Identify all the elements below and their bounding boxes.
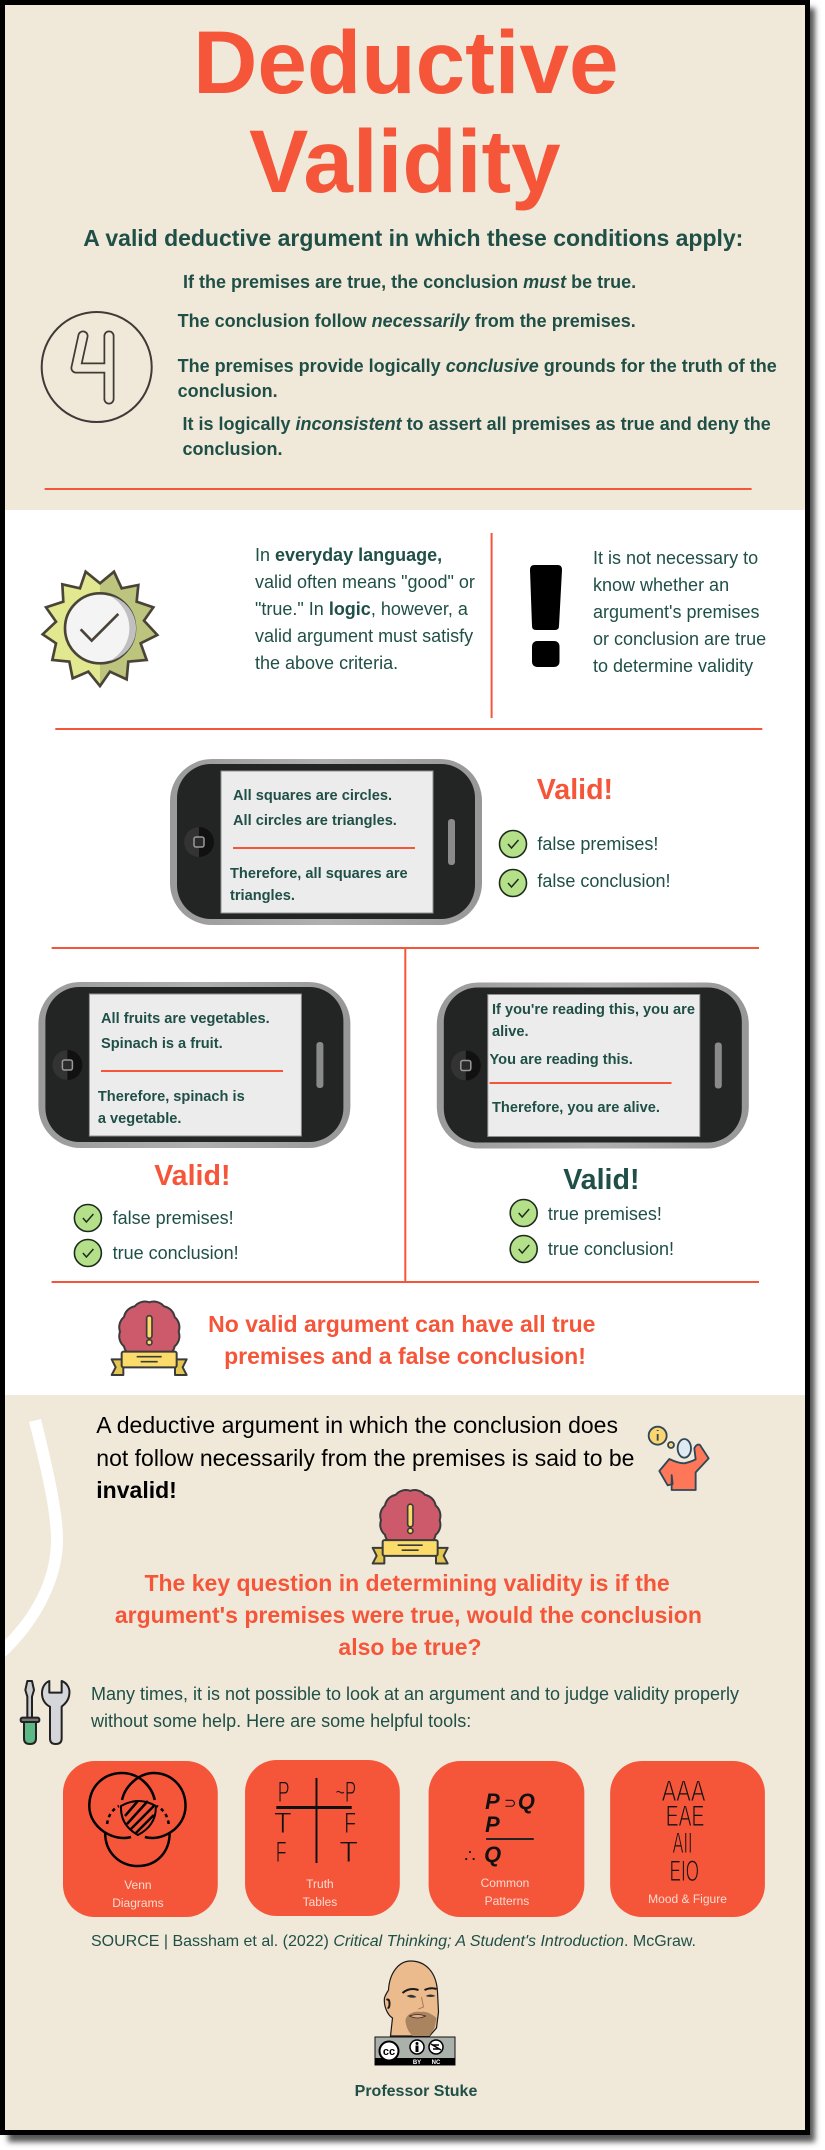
text: validity note: argument's premises [593, 602, 760, 622]
text: validity note: It is not necessary to [593, 548, 758, 568]
conditions list [178, 272, 777, 459]
license badge: creative commons: NC [432, 2060, 441, 2066]
text: everyday language: valid often means "good" or [255, 572, 475, 592]
icon: number four in circle [42, 312, 152, 422]
key question: The key question in determining validity is if the [144, 1570, 670, 1596]
text: validity note [593, 548, 766, 676]
verdict: true premises, true conclusion [510, 1164, 674, 1262]
card: truth tables: T [274, 1807, 292, 1840]
card: common patterns [429, 1761, 584, 1917]
callout: no valid argument [208, 1311, 595, 1369]
phone: squares example: Therefore, all squares are [230, 866, 408, 882]
verdict: false premises, true conclusion: true conclusion! [113, 1243, 239, 1263]
verdict: false premises, true conclusion: Valid! [154, 1160, 230, 1192]
card: venn diagrams: Diagrams [112, 1896, 164, 1910]
text: invalid definition: not follow necessarily from the premises is said to be [96, 1445, 634, 1471]
license badge: creative commons: cc [383, 2046, 395, 2058]
phone: fruits example: a vegetable. [98, 1111, 181, 1127]
verdict: true premises, true conclusion: Valid! [563, 1164, 639, 1196]
card: common patterns: ⊃ [504, 1795, 516, 1812]
text: invalid definition: invalid! [96, 1477, 177, 1503]
decorative white arc [5, 1419, 63, 1657]
key question [115, 1570, 702, 1660]
card: mood and figure [610, 1761, 765, 1917]
verdict: false premises, false conclusion: Valid! [537, 774, 613, 806]
card: truth tables: T [339, 1836, 358, 1869]
card: mood and figure: EAE [666, 1800, 704, 1833]
conditions list: conclusion. [178, 381, 278, 401]
card: common patterns: Q [518, 1789, 535, 1814]
callout: no valid argument: No valid argument can have all true [208, 1311, 595, 1337]
conditions list: The premises provide logically conclusive grounds for the truth of the [178, 356, 777, 376]
verdict: false premises, false conclusion: false conclusion! [537, 871, 670, 891]
icon: warning seal 2 [373, 1490, 448, 1563]
verdict: false premises, true conclusion [74, 1160, 239, 1266]
card: common patterns: Patterns [485, 1894, 529, 1908]
phone: fruits example [38, 982, 350, 1148]
key question: also be true? [338, 1634, 482, 1660]
verdict: true premises, true conclusion: true conclusion! [548, 1239, 674, 1259]
author name: Professor Stuke [355, 2083, 477, 2100]
card: truth tables: P [278, 1776, 290, 1809]
phone: fruits example: Therefore, spinach is [98, 1089, 245, 1105]
verdict: false premises, false conclusion: false premises! [537, 834, 658, 854]
subtitle: A valid deductive argument in which these conditions apply: [83, 225, 743, 251]
phone: squares example [170, 759, 482, 925]
phone: squares example: All squares are circles. [233, 788, 392, 804]
card: truth tables: Tables [303, 1895, 337, 1909]
text: everyday language: valid argument must satisfy [255, 626, 473, 646]
portrait: professor [384, 1961, 438, 2036]
source citation: SOURCE | Bassham et al. (2022) Critical Thinking; A Student's Introduction. McGraw. [91, 1933, 696, 1950]
conditions list: conclusion. [182, 439, 283, 459]
icon: exclamation mark [530, 565, 562, 667]
text: everyday language: the above criteria. [255, 653, 398, 673]
verdict: true premises, true conclusion: true premises! [548, 1204, 662, 1224]
text: validity note: or conclusion are true [593, 629, 766, 649]
callout: no valid argument: premises and a false conclusion! [224, 1343, 586, 1369]
card: venn diagrams: Venn [124, 1878, 152, 1892]
card: truth tables: Truth [306, 1877, 334, 1891]
phone: reading example: Therefore, you are alive. [492, 1100, 660, 1116]
card: mood and figure: AAA [662, 1775, 705, 1808]
text: everyday language: "true." In logic, however, a [255, 599, 469, 619]
phone: reading example: If you're reading this, you are [492, 1002, 695, 1018]
card: common patterns: Q [484, 1842, 501, 1867]
card: common patterns: ∴ [464, 1846, 476, 1866]
card: mood and figure: AII [673, 1827, 692, 1860]
title: Validity [249, 111, 561, 211]
icon: approval badge [43, 572, 157, 686]
conditions list: It is logically inconsistent to assert all premises as true and deny the [182, 414, 771, 434]
text: invalid definition: A deductive argument in which the conclusion does [96, 1412, 618, 1438]
icon: warning seal [112, 1302, 187, 1375]
conditions list: The conclusion follow necessarily from the premises. [178, 311, 636, 331]
card: truth tables: ~P [335, 1776, 356, 1809]
icon: tools [21, 1681, 69, 1744]
title: Deductive [193, 12, 618, 112]
phone: reading example: alive. [492, 1024, 529, 1040]
phone: squares example: All circles are triangles. [233, 813, 397, 829]
license badge: creative commons: BY [413, 2060, 421, 2066]
text: helpful tools intro: without some help. Here are some helpful tools: [90, 1711, 471, 1731]
card: mood and figure: EIO [670, 1855, 699, 1888]
icon: person thinking [649, 1427, 709, 1490]
card: common patterns: P [485, 1812, 500, 1837]
card: truth tables: F [276, 1836, 287, 1869]
phone: fruits example: Spinach is a fruit. [101, 1036, 223, 1052]
conditions list: If the premises are true, the conclusion must be true. [183, 272, 636, 292]
card: venn diagrams [63, 1761, 218, 1917]
phone: fruits example: All fruits are vegetables. [101, 1011, 270, 1027]
card: truth tables [245, 1760, 400, 1916]
phone: reading example: You are reading this. [490, 1052, 633, 1068]
card: common patterns: P [485, 1789, 500, 1814]
text: helpful tools intro: Many times, it is not possible to look at an argument and to judge validity properly [91, 1684, 739, 1704]
title [193, 12, 618, 211]
text: everyday language [255, 545, 475, 673]
verdict: false premises, true conclusion: false premises! [113, 1208, 234, 1228]
license badge: creative commons [375, 2037, 455, 2066]
key question: argument's premises were true, would the conclusion [115, 1602, 702, 1628]
text: invalid definition [96, 1412, 634, 1503]
text: everyday language: In everyday language, [255, 545, 442, 565]
card: common patterns: Common [481, 1876, 529, 1890]
phone: squares example: triangles. [230, 888, 295, 904]
phone: reading example [437, 982, 749, 1148]
verdict: false premises, false conclusion [500, 774, 670, 896]
card: truth tables: F [344, 1807, 356, 1840]
text: validity note: know whether an [593, 575, 729, 595]
card: mood and figure: Mood & Figure [648, 1892, 727, 1906]
text: validity note: to determine validity [593, 656, 753, 676]
text: helpful tools intro [90, 1684, 739, 1731]
